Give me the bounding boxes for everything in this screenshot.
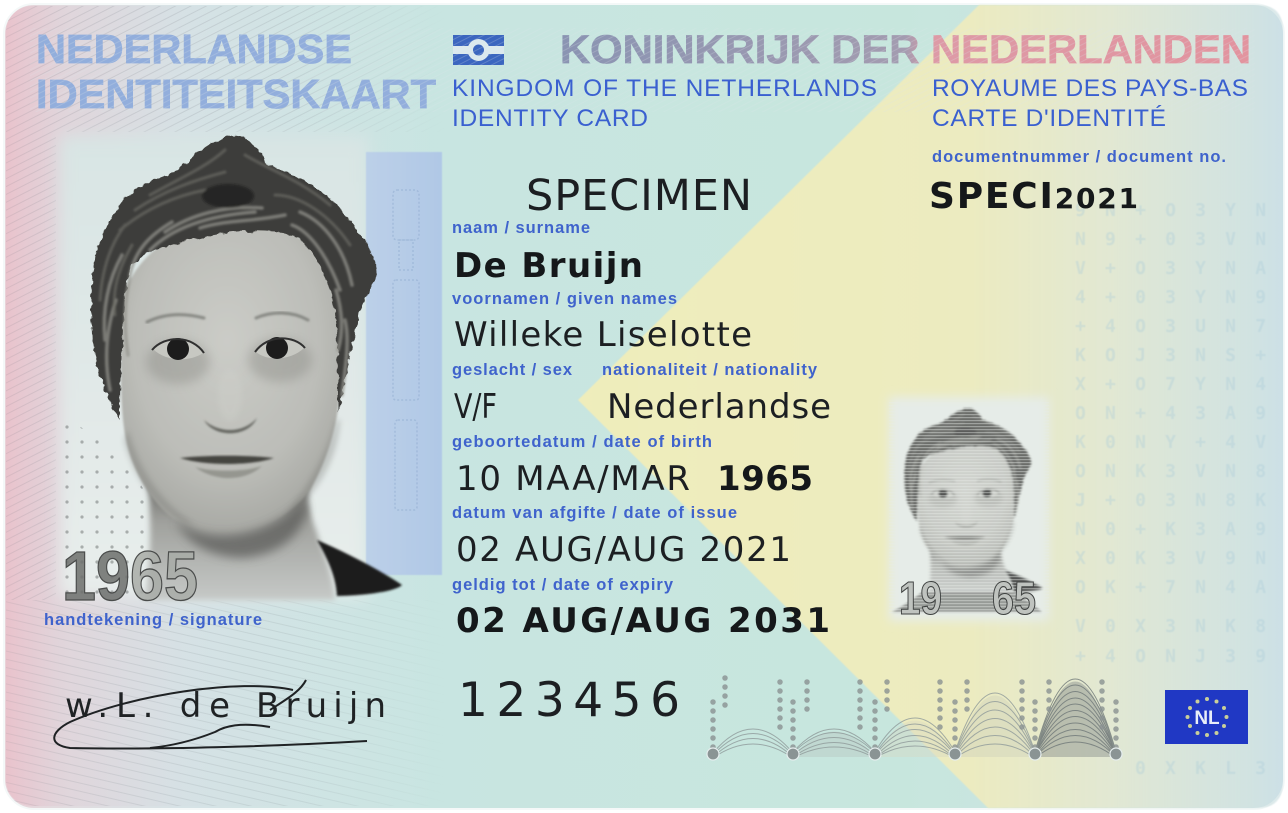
yellow diagonal wedge: [578, 5, 1283, 808]
ghost scanlines: [889, 400, 1049, 615]
field: date of expiry: 02 AUG/AUG 2031: [456, 601, 830, 641]
icon: chip symbol: [453, 35, 504, 65]
heading: Koninkrijk der Nederlanden: KONINKRIJK DER NEDERLANDEN: [560, 28, 1251, 72]
panel: ghost portrait: [889, 397, 1049, 624]
signature: [54, 680, 386, 749]
field: given names: [452, 290, 752, 355]
subtitle: French: ROYAUME DES PAYS-BAS: [932, 75, 1248, 102]
field: date of expiry: geldig tot / date of expiry: [452, 576, 674, 594]
subtitle: French: [932, 75, 1248, 132]
mouth: [180, 456, 274, 478]
background microtext pattern: 0XKL3: [1135, 758, 1285, 779]
eyes: [152, 337, 305, 360]
field: date of issue: 02 AUG/AUG 2021: [456, 530, 791, 570]
field: sex: geslacht / sex: [452, 361, 573, 379]
field: sex: V/F: [454, 387, 497, 427]
background microtext pattern: ONK3VN8: [1075, 461, 1285, 482]
label: signature: handtekening / signature: [44, 611, 262, 629]
background microtext pattern: 4+03YN9: [1075, 287, 1285, 308]
photo background: [60, 136, 368, 596]
birth year overlay: 1965: [62, 537, 198, 615]
ghost face: [892, 408, 1042, 612]
heading: Nederlandse Identiteitskaart: IDENTITEITSKAART: [36, 71, 436, 117]
field: card number: 123456: [458, 673, 680, 728]
field: given names: Willeke Liselotte: [454, 315, 752, 355]
dot columns: [713, 678, 1116, 750]
signature: Bruijn: [256, 686, 386, 726]
portrait: [91, 135, 402, 600]
ghost birth year: 65: [992, 572, 1036, 624]
field: date of birth: geboortedatum / date of birth: [452, 433, 712, 451]
field: surname: naam / surname: [452, 219, 590, 237]
field: surname: [452, 219, 643, 286]
background microtext pattern: +4O3UN7: [1075, 316, 1285, 337]
head: [121, 222, 342, 534]
field: nationality: Nederlandse: [607, 387, 831, 427]
stars: [1186, 697, 1228, 737]
signature: w.L. de: [65, 686, 230, 726]
document number value: SPECI2021: [929, 176, 1138, 217]
eyebrows: [147, 313, 308, 322]
subtitle: English: KINGDOM OF THE NETHERLANDS: [452, 75, 877, 102]
subtitle: English: [452, 75, 877, 132]
country code: NL: [1194, 708, 1220, 729]
eye sockets: [146, 338, 312, 384]
nose: [204, 369, 257, 433]
ghost background: [889, 397, 1049, 621]
kinegram hologram band: [707, 678, 1122, 760]
background microtext pattern: X0K3V9N: [1075, 548, 1285, 569]
field: date of birth: 10 MAA/MAR: [456, 459, 690, 499]
background microtext pattern: K0NY+4V: [1075, 432, 1285, 453]
subtitle: French: CARTE D'IDENTITÉ: [932, 105, 1166, 132]
field: sex: [452, 361, 573, 427]
background microtext pattern: V0X3NK8: [1075, 616, 1285, 637]
hair highlights: [100, 150, 352, 395]
background microtext pattern: J+03N8K: [1075, 490, 1285, 511]
shoulder: [317, 540, 402, 596]
hair: [91, 135, 377, 420]
background microtext pattern: X+O7YN4: [1075, 374, 1285, 395]
neck: [145, 470, 335, 600]
background microtext pattern: ON+43A9: [1075, 403, 1285, 424]
field: date of issue: datum van afgifte / date of issue: [452, 504, 737, 522]
field: given names: voornamen / given names: [452, 290, 677, 308]
field: date of expiry: [452, 576, 830, 641]
chin shadow: [175, 500, 306, 558]
security strip: [366, 152, 442, 575]
heading: Nederlandse Identiteitskaart: [36, 26, 436, 117]
field: date of issue: [452, 504, 791, 570]
background microtext pattern: OK+7N4A: [1075, 577, 1285, 598]
panel: main portrait: [60, 135, 442, 615]
guilloche line fields: [6, 6, 383, 806]
heading: Nederlandse Identiteitskaart: NEDERLANDSE: [36, 26, 352, 72]
heading texture overlay: [30, 28, 1255, 112]
field: specimen heading: SPECIMEN: [526, 171, 752, 221]
waves: [713, 679, 1116, 758]
field: surname: De Bruijn: [454, 246, 643, 286]
background microtext pattern: [1075, 200, 1285, 779]
icon: EU flag with NL: [1165, 690, 1248, 744]
background microtext pattern: V+O3YNA: [1075, 258, 1285, 279]
field: date of birth: 1965: [717, 459, 813, 499]
halftone overlay: [60, 415, 240, 600]
field: nationality: nationaliteit / nationality: [602, 361, 818, 379]
background microtext pattern: N0+K3A9: [1075, 519, 1285, 540]
ghost birth year: 19: [899, 572, 942, 624]
jaw shade: [124, 420, 340, 525]
background microtext pattern: KOJ3NS+: [1075, 345, 1285, 366]
background microtext pattern: +4ONJ39: [1075, 646, 1285, 667]
background microtext pattern: N9+03VN: [1075, 229, 1285, 250]
background microtext pattern: 9N+O3YN: [1075, 200, 1285, 221]
subtitle: English: IDENTITY CARD: [452, 105, 648, 132]
field: nationality: [602, 361, 831, 427]
label: document number: documentnummer / document no.: [932, 148, 1226, 166]
ghost birth year: [899, 572, 1036, 624]
field: date of birth: [452, 433, 813, 499]
base dots: [707, 748, 1122, 760]
